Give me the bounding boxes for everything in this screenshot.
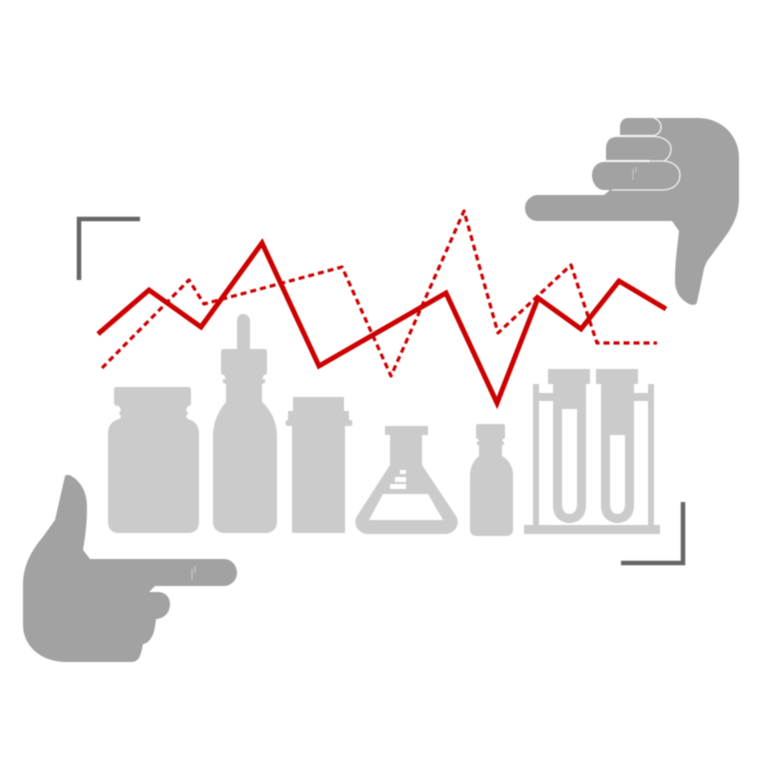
test tube 1: [548, 369, 590, 523]
fingernail mark: [633, 167, 636, 180]
test tube 2: [596, 369, 638, 523]
icon: pill bottle: [286, 397, 352, 533]
icon: dropper bottle: [213, 314, 277, 533]
solid line series: [98, 243, 666, 403]
finger 1: [620, 118, 661, 135]
finger outlines: [604, 118, 680, 190]
flask measurement ticks: [390, 470, 406, 489]
corner bracket: top left: [79, 219, 140, 280]
dashed line series: [102, 211, 657, 376]
finger 3: [592, 162, 680, 190]
icon: conical flask: [355, 426, 458, 534]
rack: [524, 384, 660, 534]
finger 2: [606, 137, 671, 160]
icon: test tube rack: [524, 369, 660, 534]
icon: hand bottom left: [23, 475, 237, 662]
corner bracket: bottom right: [621, 502, 683, 563]
icon: hand top right: [525, 118, 739, 305]
icon: small bottle: [470, 424, 513, 536]
icon: wide jar: [108, 387, 199, 533]
fingernail mark: [192, 566, 195, 580]
